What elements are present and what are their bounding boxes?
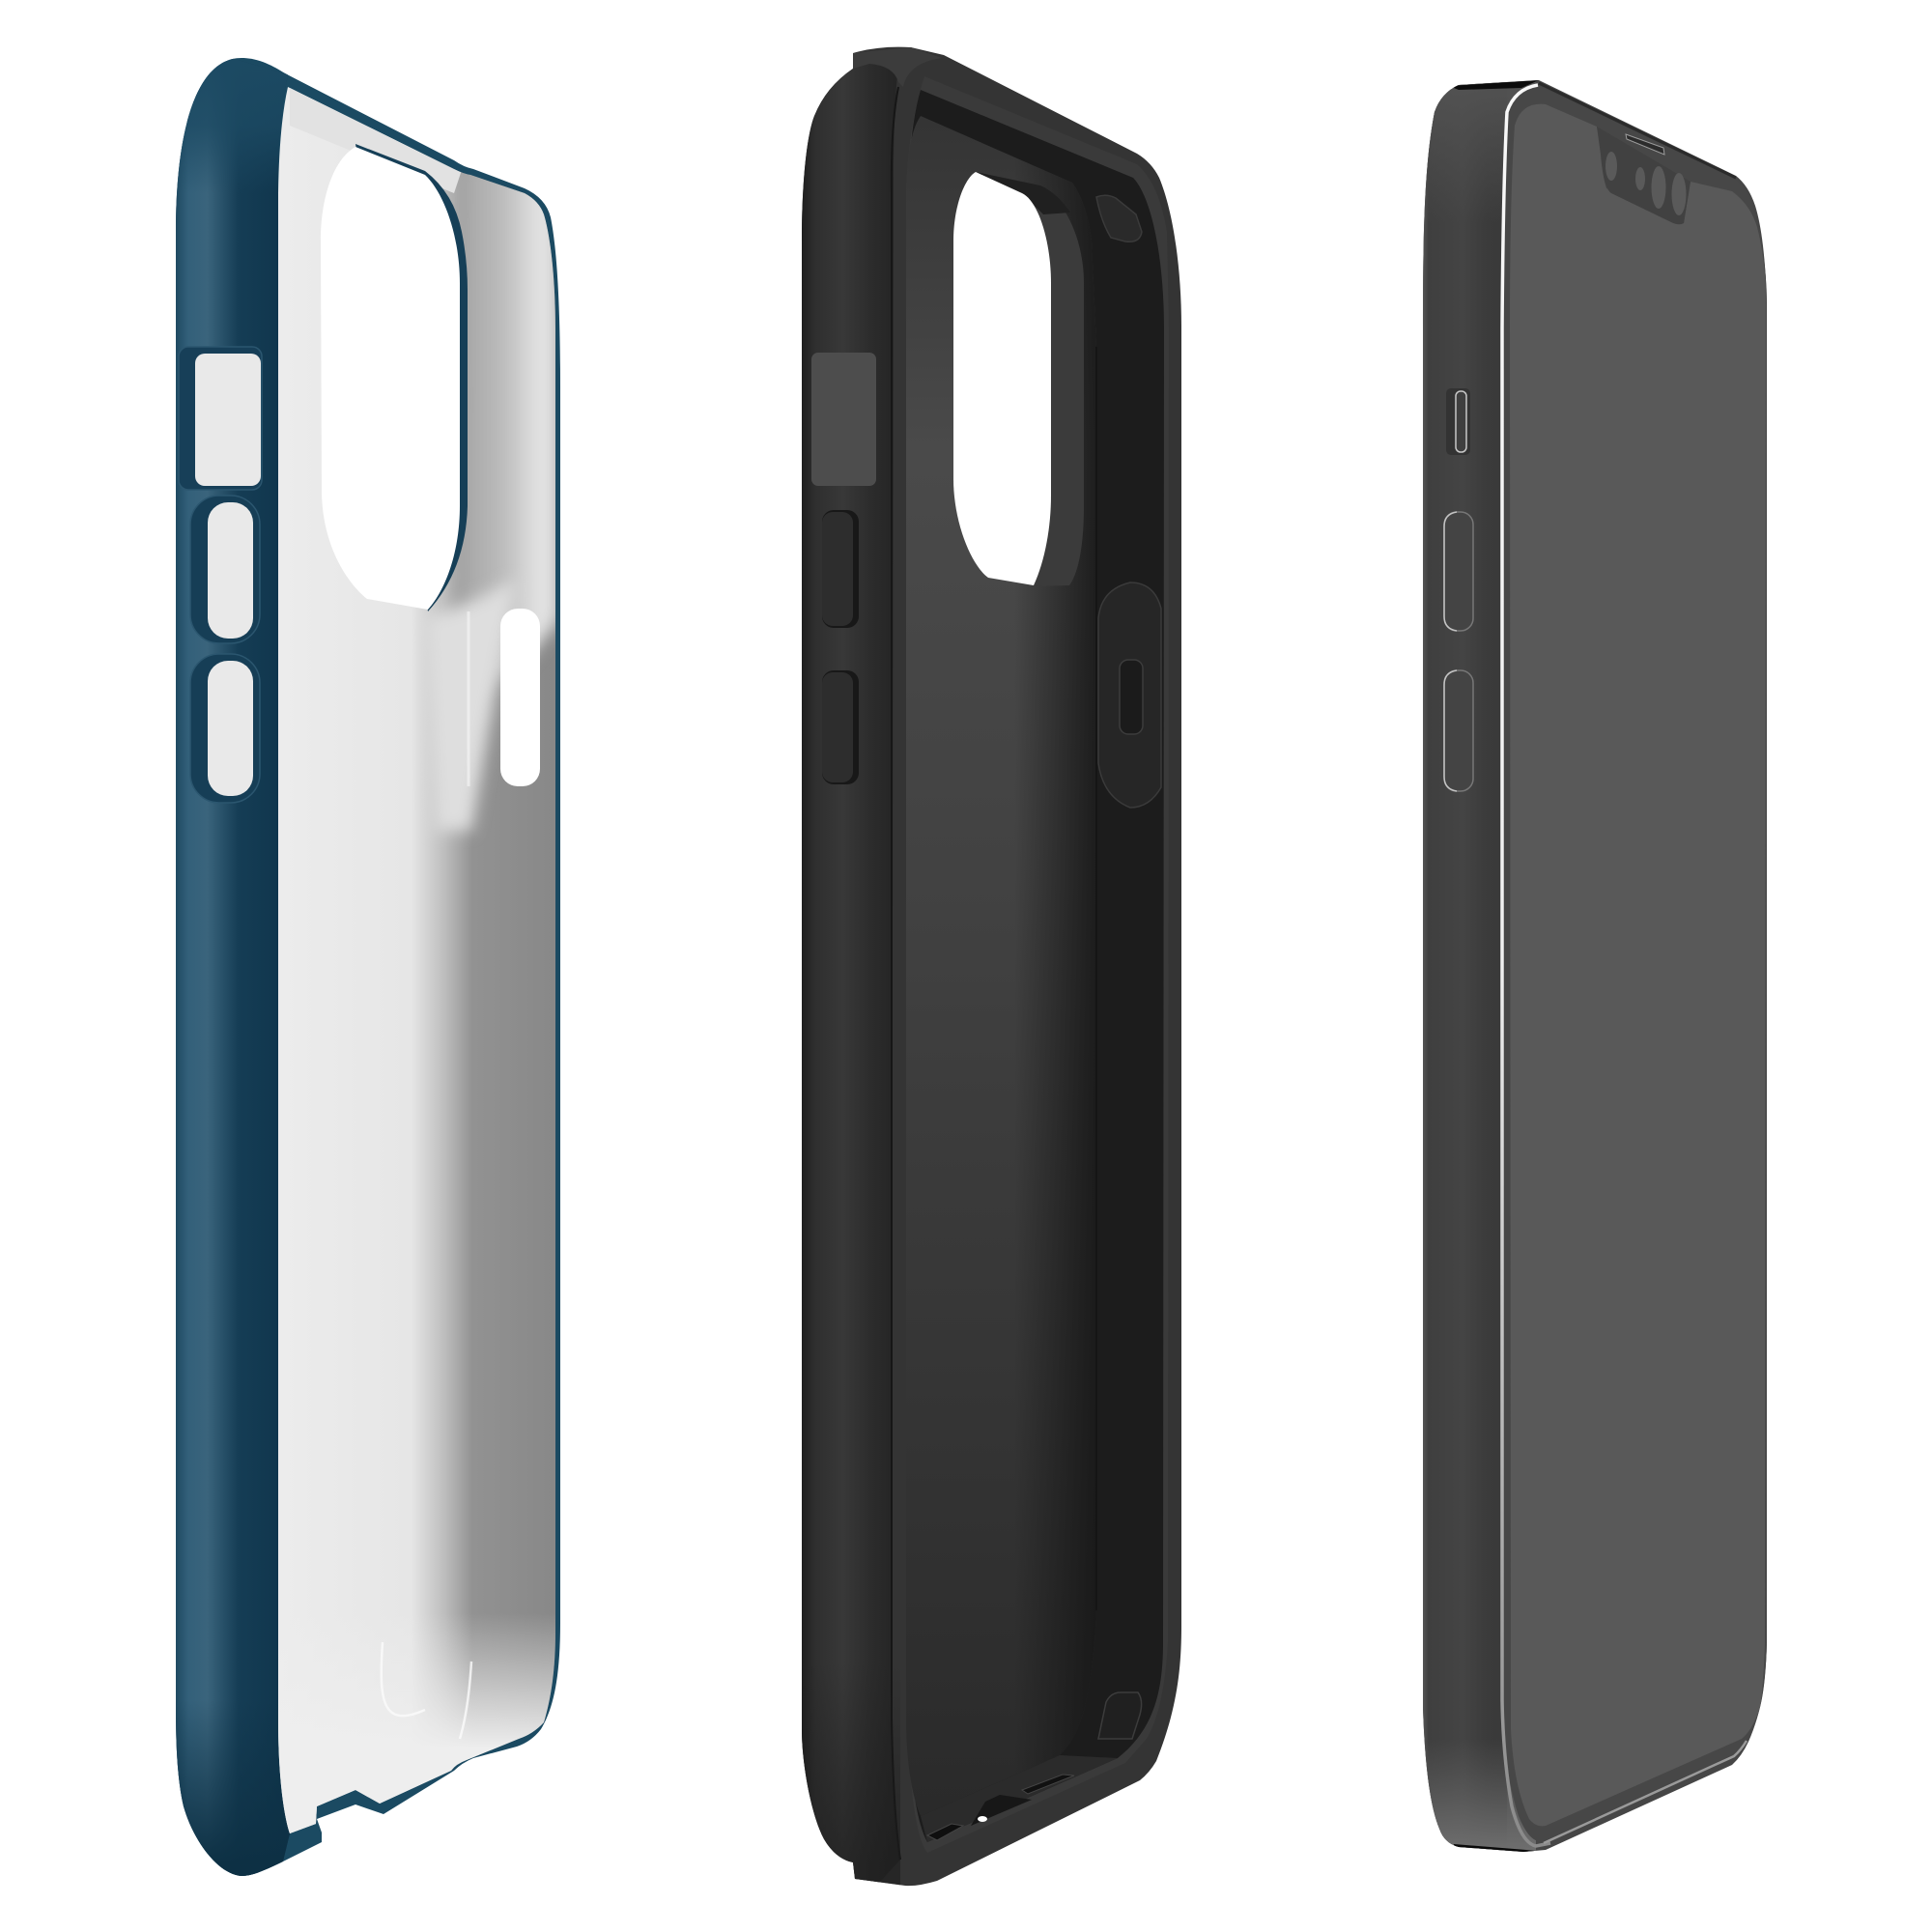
camera lens 2 xyxy=(1635,167,1645,190)
back panel edge line xyxy=(1095,347,1097,1610)
camera cutout rim xyxy=(355,144,468,611)
speaker grille xyxy=(1626,134,1664,155)
black case back panel xyxy=(898,97,1101,1835)
camera lens 4 xyxy=(1671,173,1687,215)
camera cutout xyxy=(321,147,460,610)
bottom wall xyxy=(921,1755,1118,1842)
mute switch xyxy=(1446,388,1470,455)
panel: black case, inside view xyxy=(792,39,1181,1893)
black case shell xyxy=(802,47,1181,1886)
camera lens 3 xyxy=(1652,166,1665,209)
blue case shell xyxy=(176,58,560,1876)
window cutout surround xyxy=(179,347,262,490)
chrome lower edge xyxy=(1544,1741,1747,1843)
bottom corner pad xyxy=(1098,1692,1142,1739)
volume button upper xyxy=(822,510,859,628)
panel: phone, front and side view xyxy=(1420,77,1767,1855)
port recess xyxy=(971,1795,1032,1826)
volume button lower xyxy=(822,670,859,784)
volume cutout upper xyxy=(208,502,253,639)
notch xyxy=(1597,127,1690,224)
side button cutout xyxy=(500,609,540,786)
side button xyxy=(1120,660,1143,734)
top edge line xyxy=(1539,83,1736,178)
volume cutout lower xyxy=(208,661,253,796)
volume cutout surround lower xyxy=(190,654,260,803)
black case details xyxy=(802,47,912,1886)
speaker slot xyxy=(927,1824,963,1840)
phone side band xyxy=(1420,77,1546,1855)
product illustration: three phone case views xyxy=(176,46,1767,1886)
side button housing xyxy=(1098,582,1161,808)
chrome edge xyxy=(1502,85,1550,1846)
phone screen xyxy=(1510,104,1766,1826)
black case interior rim xyxy=(906,76,1169,1853)
top corner pad xyxy=(1096,195,1142,242)
charge port slot xyxy=(1022,1775,1074,1794)
phone body xyxy=(1423,80,1767,1852)
window patch xyxy=(811,353,876,486)
volume cutout surround upper xyxy=(190,496,260,643)
blue case side wall xyxy=(176,58,290,1876)
phone front face xyxy=(1502,85,1767,1841)
panel: blue case, inside view xyxy=(164,39,560,1893)
volume button lower face xyxy=(822,672,853,782)
volume button upper face xyxy=(822,512,853,626)
camera surround top shadow xyxy=(976,172,1070,214)
camera lens 1 xyxy=(1605,152,1617,181)
camera cutout xyxy=(953,172,1051,585)
black case interior walls xyxy=(908,90,1164,1842)
camera surround wall xyxy=(976,172,1084,586)
volume button down xyxy=(1444,670,1473,791)
window cutout xyxy=(195,354,261,486)
blue case interior xyxy=(270,77,560,1845)
speaker hole xyxy=(978,1816,987,1822)
volume button up xyxy=(1444,512,1473,631)
